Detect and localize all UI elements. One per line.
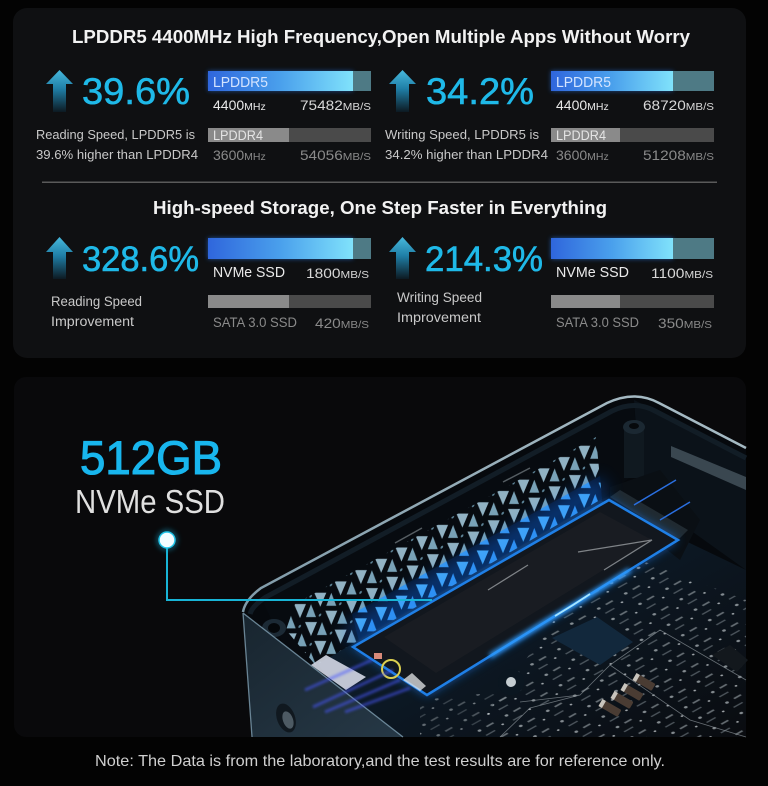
bars: NVMe vs SATA write: NVMe SSD: [556, 264, 629, 281]
stat: reading speed 39.6%: 39.6% higher than LPDDR4: [36, 147, 198, 162]
bars: NVMe vs SATA read: NVMe SSD: [213, 264, 285, 281]
gray slots: [395, 468, 530, 543]
blue glow over vent: [345, 478, 608, 645]
SSD solder dots: [403, 673, 426, 691]
bars: LPDDR5 vs LPDDR4 write: LPDDR5: [556, 75, 611, 91]
bars: LPDDR5 vs LPDDR4 read: 4400MHz: [213, 97, 266, 113]
stat: writing speed 214.3%: Writing Speed: [397, 290, 482, 305]
heading: LPDDR5: LPDDR5 4400MHz High Frequency,Open Multiple Apps Without Worry: [72, 27, 690, 47]
SSD bright edge: [490, 570, 630, 656]
bars: NVMe vs SATA read: [208, 238, 371, 331]
standoff post: [623, 420, 645, 478]
board chip: [552, 617, 633, 665]
bars: LPDDR5 vs LPDDR4 read: 75482 MB/S: [300, 97, 371, 113]
bars: NVMe vs SATA write: SATA 3.0 SSD: [556, 314, 639, 330]
traces: [500, 630, 746, 737]
ribbon: [311, 655, 366, 690]
front wall: [243, 613, 403, 737]
stat: reading speed 328.6%: Reading Speed: [51, 294, 142, 309]
panel: memory and storage speed: [13, 8, 746, 358]
stat: reading speed 39.6%: Reading Speed, LPDDR5 is: [36, 127, 195, 142]
bars: LPDDR5 vs LPDDR4 read: [208, 71, 371, 163]
stat: writing speed 214.3%: 214.3%: [425, 240, 543, 279]
board pads: [470, 560, 746, 737]
heading: storage: High-speed Storage, One Step Faster in Everything: [153, 198, 607, 218]
stat: reading speed 328.6%: Improvement: [51, 314, 134, 329]
capacitors: [598, 673, 656, 717]
bars: NVMe vs SATA write: [551, 238, 714, 331]
bars: LPDDR5 vs LPDDR4 write: 3600MHz: [556, 147, 609, 163]
round pad: [498, 669, 524, 695]
circuit board: [318, 500, 746, 737]
vent grid lit blue: [352, 476, 602, 645]
wall edges: [243, 613, 403, 737]
screw hole: [272, 701, 300, 735]
stat: reading speed 328.6%: 328.6%: [82, 240, 199, 279]
stat: writing speed 34.2%: Writing Speed, LPDDR5 is: [385, 127, 540, 142]
bars: NVMe vs SATA read: 1800 MB/S: [306, 265, 369, 281]
light bar: [671, 446, 746, 490]
panel: SSD photo: [14, 377, 748, 737]
note: Note: The Data is from the laboratory,and the test results are for reference only.: [95, 753, 665, 770]
SSD board: [353, 500, 678, 695]
far-right wall: [634, 400, 746, 570]
bars: LPDDR5 vs LPDDR4 read: 54056 MB/S: [300, 147, 371, 163]
mounting ring: [382, 660, 400, 678]
stat: writing speed 214.3%: [389, 237, 543, 325]
far wall: [262, 406, 640, 680]
stat: reading speed 39.6%: 39.6%: [82, 71, 190, 112]
bars: LPDDR5 vs LPDDR4 write: LPDDR4: [556, 127, 606, 143]
light streaks: [305, 660, 410, 712]
bars: LPDDR5 vs LPDDR4 write: 4400MHz: [556, 97, 609, 113]
callout: 512GB NVMe SSD: 512GB: [80, 431, 222, 484]
bars: NVMe vs SATA read: 420MB/S: [315, 315, 369, 331]
SSD chip: [384, 512, 652, 673]
stat: reading speed 39.6%: [36, 70, 198, 162]
stat: writing speed 34.2%: 34.2% higher than LPDDR4: [385, 147, 548, 162]
illustration: mini PC interior: [243, 396, 748, 737]
bars: NVMe vs SATA write: 1100 MB/S: [651, 265, 713, 281]
SSD glow: [353, 500, 678, 695]
callout: 512GB NVMe SSD: [75, 431, 432, 600]
connector: [610, 470, 700, 560]
bars: LPDDR5 vs LPDDR4 write: 51208 MB/S: [643, 147, 714, 163]
rim highlight: [243, 396, 746, 612]
stat: writing speed 214.3%: Improvement: [397, 310, 481, 325]
connector streaks: [634, 480, 690, 520]
bars: LPDDR5 vs LPDDR4 write: [551, 71, 714, 163]
second chip: [712, 645, 748, 672]
SSD detail marks: [488, 540, 652, 590]
bars: LPDDR5 vs LPDDR4 read: LPDDR5: [213, 75, 268, 91]
stat: reading speed 328.6%: [46, 237, 199, 329]
pink pad: [374, 653, 382, 659]
stat: writing speed 34.2%: [385, 70, 548, 162]
left standoff: [262, 619, 286, 637]
vent grid: [286, 437, 602, 668]
callout: 512GB NVMe SSD: NVMe SSD: [75, 483, 225, 520]
bars: LPDDR5 vs LPDDR4 write: 68720 MB/S: [643, 97, 714, 113]
stat: writing speed 34.2%: 34.2%: [426, 71, 534, 112]
bars: LPDDR5 vs LPDDR4 read: 3600MHz: [213, 147, 266, 163]
bars: NVMe vs SATA write: 350MB/S: [658, 315, 712, 331]
device interior: [243, 396, 746, 737]
bars: NVMe vs SATA read: SATA 3.0 SSD: [213, 314, 297, 330]
bars: LPDDR5 vs LPDDR4 read: LPDDR4: [213, 127, 263, 143]
